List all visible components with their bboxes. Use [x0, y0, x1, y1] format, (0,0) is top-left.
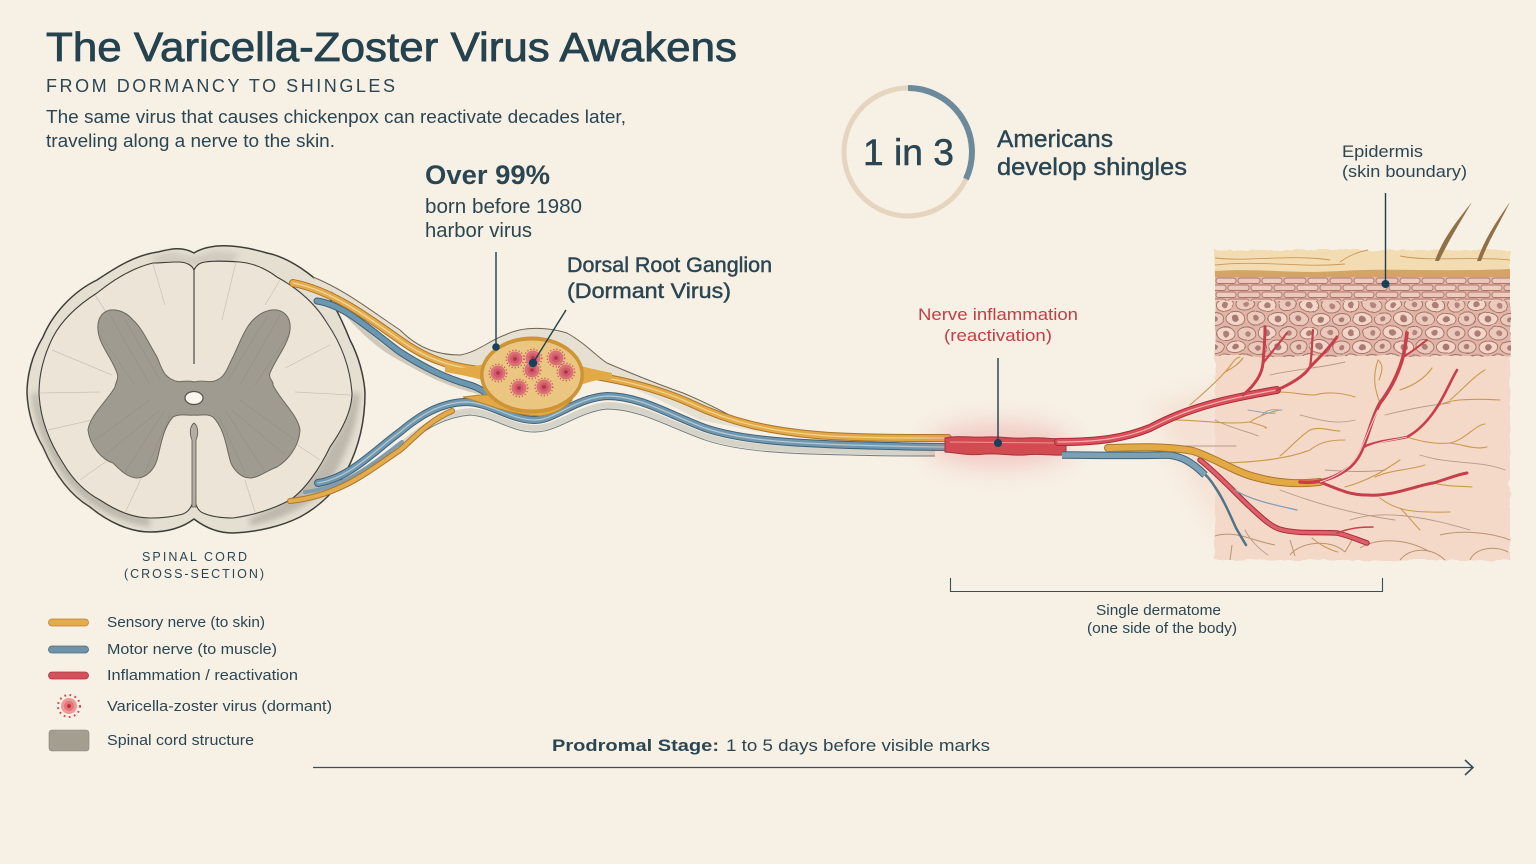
- dorsal root ganglion: [445, 336, 612, 414]
- skin block: [1058, 202, 1510, 560]
- label: epidermis: (skin boundary): [1342, 163, 1467, 181]
- nerve inflammation site: [928, 423, 1072, 467]
- white matter radial lines: [40, 262, 350, 513]
- label: spinal cord: [124, 550, 264, 581]
- leader: epidermis: [1382, 193, 1390, 288]
- flat cells: [1215, 277, 1510, 301]
- label: spinal cord: SPINAL CORD: [142, 550, 247, 564]
- stat callout: over 99%: harbor virus: [425, 220, 532, 242]
- anterior median fissure: [190, 423, 198, 507]
- legend: virus: [58, 695, 332, 717]
- label: dorsal root ganglion: [567, 254, 772, 303]
- motor nerve branches: [1062, 410, 1297, 545]
- meninges shading: [32, 250, 360, 527]
- stat callout: over 99%: born before 1980: [425, 196, 582, 218]
- prodromal stage label: 1 to 5 days before visible marks: [726, 736, 990, 755]
- nerve sheaths: [313, 277, 935, 494]
- legend: [48, 615, 332, 751]
- lower cobbled skin lines: [1215, 532, 1510, 560]
- stat ring: 1 in 3: 1 in 3: [863, 132, 954, 173]
- legend: sensory nerve: [48, 615, 265, 631]
- label: single dermatome: [1087, 602, 1237, 637]
- leader: over 99% to ganglion: [492, 252, 500, 351]
- stat label: Americans develop shingles: Americans: [997, 126, 1113, 153]
- intro text: The same virus that causes chickenpox can reactivate decades later,: [46, 107, 626, 127]
- legend: inflammation: Inflammation / reactivation: [107, 668, 298, 684]
- gray matter striations: [95, 315, 295, 472]
- leader: dorsal root ganglion: [529, 310, 566, 367]
- stat callout: over 99%: [425, 160, 582, 242]
- white matter: [39, 261, 352, 518]
- sensory nerve into skin: [1108, 447, 1320, 483]
- meninges outer layer: [27, 246, 365, 533]
- stat ring: 1 in 3: [844, 88, 972, 216]
- legend: virus: Varicella-zoster virus (dormant): [107, 699, 332, 715]
- fine gold and tan nerve twigs: [1175, 357, 1500, 552]
- label: epidermis: [1342, 143, 1467, 181]
- central canal: [185, 392, 203, 404]
- stat callout: over 99%: Over 99%: [425, 160, 550, 190]
- red inflamed branches: [1058, 327, 1467, 533]
- legend: sensory nerve: Sensory nerve (to skin): [107, 615, 265, 631]
- timeline arrow: [313, 760, 1473, 775]
- legend: spinal cord structure: Spinal cord structure: [107, 733, 254, 749]
- spinal cord cross-section: [27, 246, 365, 533]
- label: spinal cord: (CROSS-SECTION): [124, 567, 264, 581]
- dermatome bracket: [950, 578, 1382, 592]
- pink glow around nerve entry: [1150, 385, 1225, 540]
- dorsal median septum: [193, 270, 195, 364]
- stat label: Americans develop shingles: develop shingles: [997, 154, 1187, 181]
- shiny highlights on branches: [1320, 410, 1378, 482]
- legend: motor nerve: [48, 642, 277, 658]
- label: nerve inflammation: (reactivation): [944, 326, 1052, 345]
- motor nerve: [305, 301, 948, 492]
- label: dorsal root ganglion: (Dormant Virus): [567, 280, 731, 303]
- leader: nerve inflammation: [994, 358, 1002, 447]
- dermis: [1215, 345, 1510, 560]
- title: The Varicella-Zoster Virus Awakens: [46, 24, 737, 70]
- gray matter butterfly: [88, 310, 300, 478]
- label: single dermatome: (one side of the body): [1087, 620, 1237, 637]
- dormant virus particles: [489, 349, 575, 397]
- intro text: traveling along a nerve to the skin.: [46, 131, 335, 151]
- round basal cells: [1215, 298, 1510, 356]
- label: epidermis: Epidermis: [1342, 143, 1423, 161]
- prodromal stage label: [552, 736, 990, 755]
- label: dorsal root ganglion: Dorsal Root Ganglion: [567, 254, 772, 277]
- label: nerve inflammation: [918, 305, 1078, 345]
- intro text: [46, 107, 626, 151]
- subtitle: FROM DORMANCY TO SHINGLES: [46, 76, 395, 96]
- legend: spinal cord structure: [49, 730, 254, 751]
- label: nerve inflammation: Nerve inflammation: [918, 305, 1078, 324]
- stat label: Americans develop shingles: [997, 126, 1187, 181]
- legend: inflammation: [48, 668, 298, 684]
- legend: motor nerve: Motor nerve (to muscle): [107, 642, 277, 658]
- red lower branch: [1200, 460, 1367, 543]
- prodromal stage label: Prodromal Stage:: [552, 736, 719, 755]
- stratum corneum: [1215, 250, 1510, 276]
- label: single dermatome: Single dermatome: [1096, 602, 1221, 619]
- hairs: [1435, 202, 1472, 261]
- sensory nerve: [290, 283, 948, 501]
